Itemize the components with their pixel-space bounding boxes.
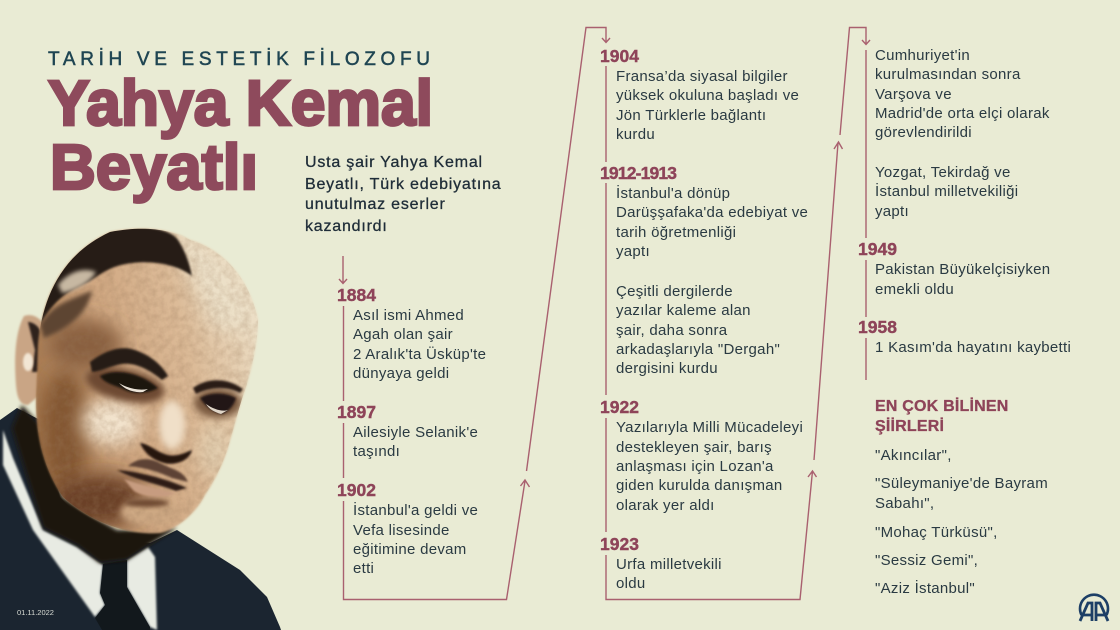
republic era: Yozgat, Tekirdağ ve: [875, 164, 1011, 181]
1884: 1884: [337, 285, 376, 305]
date: 01.11.2022: [17, 608, 54, 617]
1912-1913: yazılar kaleme alan: [616, 302, 751, 319]
1912-1913: arkadaşlarıyla "Dergah": [616, 341, 780, 358]
right eyebrow: [193, 380, 243, 394]
poems heading: ŞİİRLERİ: [875, 417, 944, 435]
1958: [858, 317, 1071, 356]
moustache and mouth: [128, 459, 188, 482]
intro text: [305, 154, 501, 235]
title: Beyatlı: [50, 131, 258, 203]
1922: giden kurulda danışman: [616, 477, 782, 494]
1902: Vefa lisesinde: [353, 522, 450, 539]
neck shadow: [12, 405, 177, 563]
jacket: [0, 408, 281, 630]
1958: 1 Kasım'da hayatını kaybetti: [875, 339, 1071, 356]
poems list: "Süleymaniye'de Bayram: [875, 475, 1048, 492]
republic era: görevlendirildi: [875, 124, 972, 141]
republic era: Madrid'de orta elçi olarak: [875, 105, 1050, 122]
left shirt collar: [3, 430, 105, 617]
left eye: [100, 372, 158, 393]
1922: destekleyen şair, barış: [616, 439, 772, 456]
1884: [337, 285, 486, 382]
poems list: "Mohaç Türküsü",: [875, 524, 998, 541]
1904: Jön Türklerle bağlantı: [616, 107, 766, 124]
1884: Asıl ismi Ahmed: [353, 307, 464, 324]
1912-1913: şair, daha sonra: [616, 322, 728, 339]
1902: etti: [353, 560, 374, 577]
head: [36, 229, 258, 533]
hair: [40, 227, 192, 325]
1912-1913: 1912-1913: [600, 163, 677, 183]
column 3 timeline: [858, 47, 1071, 356]
1922: olarak yer aldı: [616, 497, 715, 514]
1904: 1904: [600, 46, 639, 66]
1922: [600, 397, 803, 514]
republic era: kurulmasından sonra: [875, 66, 1021, 83]
1902: eğitimine devam: [353, 541, 467, 558]
1902: [337, 480, 478, 577]
1949: emekli oldu: [875, 281, 954, 298]
eye sockets: [83, 361, 167, 409]
1958: 1958: [858, 317, 897, 337]
1897: taşındı: [353, 443, 400, 460]
1923: 1923: [600, 534, 639, 554]
1923: oldu: [616, 575, 646, 592]
title: [48, 67, 433, 203]
1949: [858, 239, 1050, 298]
title: Yahya Kemal: [48, 67, 433, 139]
poems list: Sabahı",: [875, 495, 934, 512]
1922: 1922: [600, 397, 639, 417]
tie: [95, 560, 150, 630]
1949: Pakistan Büyükelçisiyken: [875, 261, 1050, 278]
1884: dünyaya geldi: [353, 365, 449, 382]
1904: yüksek okuluna başladı ve: [616, 87, 799, 104]
1912-1913: tarih öğretmenliği: [616, 224, 736, 241]
heading: kicker: TARİH VE ESTETİK FİLOZOFU: [48, 49, 430, 70]
intro text: Beyatlı, Türk edebiyatına: [305, 176, 501, 193]
1884: Agah olan şair: [353, 326, 453, 343]
poems list: "Akıncılar",: [875, 447, 952, 464]
poems list: "Sessiz Gemi",: [875, 552, 978, 569]
1923: [600, 534, 722, 592]
column 1 timeline: [337, 285, 486, 577]
1912-1913: dergisini kurdu: [616, 360, 718, 377]
republic era: [875, 47, 1050, 220]
1912-1913: [600, 163, 808, 377]
1904: Fransa’da siyasal bilgiler: [616, 68, 788, 85]
right eye: [200, 394, 236, 414]
1902: 1902: [337, 480, 376, 500]
1897: Ailesiyle Selanik'e: [353, 424, 478, 441]
skin grain: [38, 233, 258, 532]
ear: [15, 315, 48, 405]
1922: Yazılarıyla Milli Mücadeleyi: [616, 419, 803, 436]
nose: [159, 401, 185, 449]
right shirt collar: [127, 547, 157, 630]
poems list: "Aziz İstanbul": [875, 579, 975, 597]
poems list: [875, 447, 1048, 597]
poems heading: EN ÇOK BİLİNEN: [875, 397, 1008, 415]
timeline connector arrows: [339, 28, 870, 600]
intro text: kazandırdı: [305, 218, 388, 235]
republic era: Varşova ve: [875, 86, 952, 103]
1902: İstanbul'a geldi ve: [353, 501, 478, 519]
1949: 1949: [858, 239, 897, 259]
1912-1913: İstanbul'a dönüp: [616, 184, 730, 202]
1922: anlaşması için Lozan'a: [616, 458, 774, 475]
1912-1913: Çeşitli dergilerde: [616, 283, 733, 300]
republic era: İstanbul milletvekiliği: [875, 182, 1018, 200]
column 2 timeline: [600, 46, 808, 592]
intro text: unutulmaz eserler: [305, 196, 446, 213]
1912-1913: yaptı: [616, 243, 650, 260]
poems heading: [875, 397, 1008, 435]
1923: Urfa milletvekili: [616, 556, 722, 573]
1897: [337, 402, 478, 460]
republic era: Cumhuriyet'in: [875, 47, 970, 64]
1904: kurdu: [616, 126, 655, 143]
1912-1913: Darüşşafaka'da edebiyat ve: [616, 204, 808, 221]
1884: 2 Aralık'ta Üsküp'te: [353, 345, 486, 363]
intro text: Usta şair Yahya Kemal: [305, 154, 483, 171]
portrait photograph: [0, 225, 281, 630]
pale bald crown: [175, 234, 244, 333]
republic era: yaptı: [875, 203, 909, 220]
facial shading: [41, 368, 89, 492]
left eyebrow: [90, 348, 168, 380]
1897: 1897: [337, 402, 376, 422]
icon: AA logo: [1080, 595, 1108, 621]
1904: [600, 46, 799, 143]
